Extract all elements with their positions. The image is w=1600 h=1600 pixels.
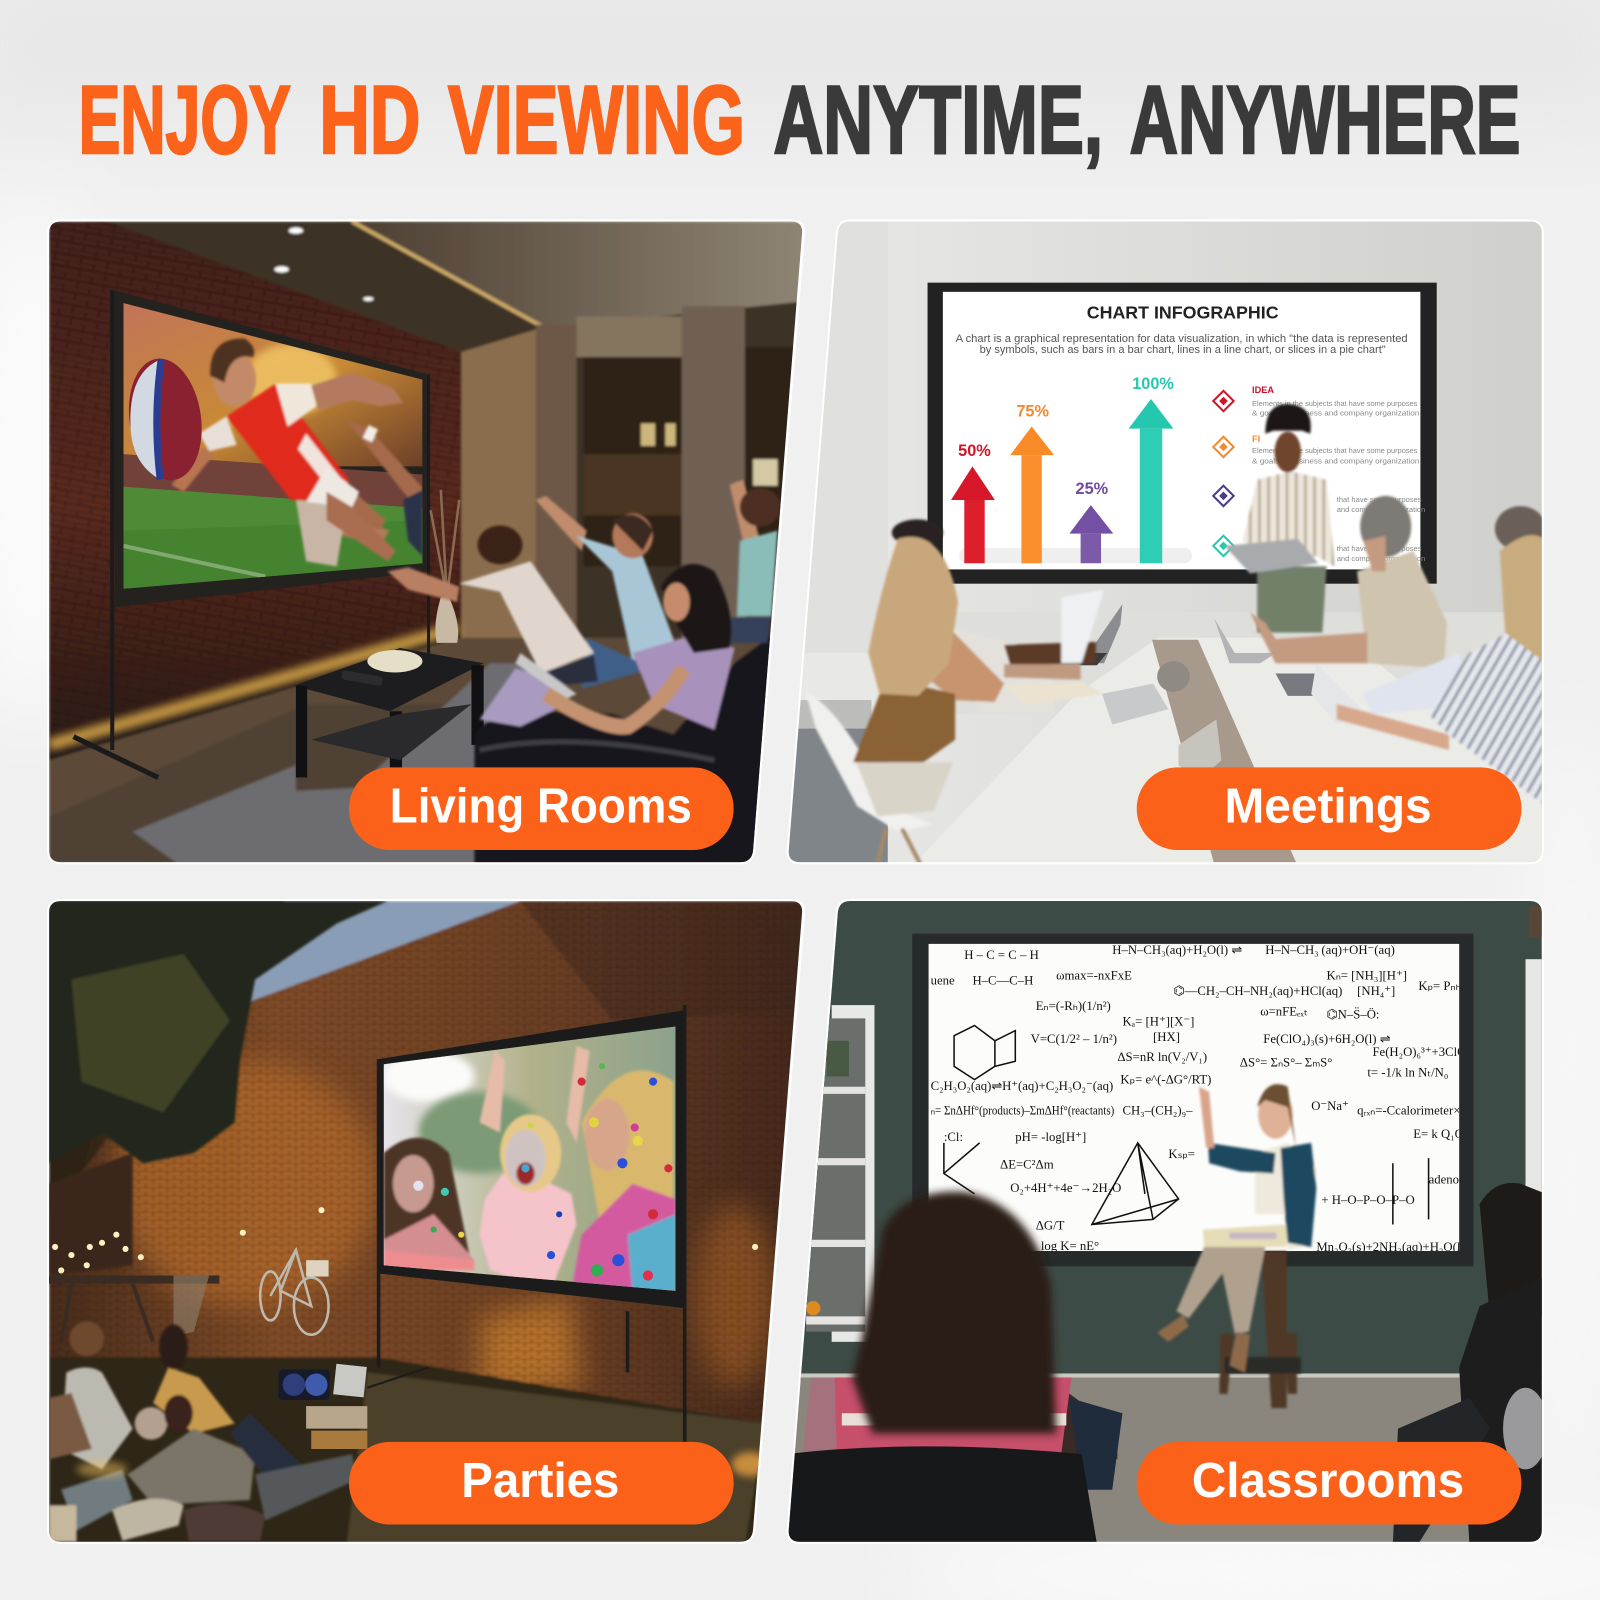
handwritten formulas: uene [931,974,955,988]
coffee table [294,648,484,780]
seated guests [49,1321,357,1542]
title: orange part: ENJOY [79,65,291,174]
arrow 100%: 100% [1132,375,1174,393]
woman with blonde hair [853,537,1004,816]
room background [49,221,809,864]
arrow 25% [1069,480,1113,563]
handwritten formulas: Eₙ=(-Rₕ)(1/n²) [1036,999,1111,1013]
hand-drawn molecule and pyramid [944,1026,1429,1224]
speaker and laptop [279,1364,367,1449]
label pill: Living Rooms: Living Rooms [390,779,692,833]
laptops [1062,604,1315,696]
table and chairs [49,1276,219,1342]
panel: classrooms [786,899,1548,1545]
rugby ball [128,358,202,480]
handwritten formulas: Kₙ= [NH₃][H⁺] [1327,969,1407,983]
handwritten formulas: log K= nE° [1041,1239,1099,1253]
girl on left [384,1138,474,1270]
bookshelves [806,906,1544,1342]
chart legend: that have some purposes [1337,544,1422,553]
chart description: A chart is a graphical representation for data visualization, in which "the data is represented [956,333,1408,345]
handwritten formulas: H – C = C – H [964,948,1039,962]
handwritten formulas: E= k Q₁Q₂/d [1413,1127,1479,1141]
title: orange part: HD [319,65,420,174]
title: orange part [79,65,745,174]
ground lights [77,1452,768,1478]
backyard scene [49,901,809,1544]
presenter [1224,404,1335,633]
chart description [956,333,1408,356]
chart legend: Elements in the subjects that have some purposes [1252,446,1418,455]
string lights [52,1207,758,1273]
chart legend: & goals in business and company organization [1252,456,1419,465]
handwritten formulas: ΔS=nR ln(V₂/V₁) [1117,1050,1207,1064]
handwritten formulas: Kₚ= Pₙₕ [1418,979,1461,993]
panel: meetings [786,219,1546,864]
people on sofa [388,480,781,864]
handwritten formulas: ⌬N–S̈–Ö: [1327,1007,1379,1021]
presentation screen [928,283,1437,584]
handwritten formulas: pH= -log[H⁺] [1015,1130,1086,1144]
chart legend: that have some purposes [1337,495,1422,504]
seated legs [1177,1247,1265,1334]
handwritten formulas: + H–O–P–O–P–O [1321,1193,1415,1207]
handwritten formulas: Kₐ= [H⁺][X⁻] [1122,1015,1194,1029]
label pill: Parties [349,1442,734,1524]
woman in lavender [480,564,735,730]
sofa [474,633,776,864]
outdoor projection screen [378,1010,685,1308]
chemistry screen [912,934,1479,1266]
chart legend: FI [1252,434,1260,444]
conference table [913,638,1546,864]
chart legend: and company organization [1337,554,1425,563]
handwritten formulas: Fe(H₂O)₆³⁺+3ClO₄⁻ [1372,1045,1478,1059]
arrow 25%: 25% [1076,480,1109,498]
handwritten formulas: qᵣₓₙ=-Ccalorimeter×ΔT [1357,1103,1477,1117]
chart legend: and company organization [1337,505,1425,514]
label pill: Meetings: Meetings [1224,779,1432,833]
vase and decor [431,490,459,643]
handwritten formulas: O₂+4H⁺+4e⁻→2H₂O [1010,1181,1121,1195]
arrow 75%: 75% [1016,402,1049,420]
bicycle [260,1250,329,1335]
student with long dark hair [786,1192,1122,1544]
panel: living rooms [47,219,809,864]
handwritten formulas: H–C—C–H [972,974,1033,988]
handwritten formulas: Fe(ClO₄)₃(s)+6H₂O(l) ⇌ [1263,1032,1391,1046]
title: orange part: VIEWING [448,65,745,174]
label pill: Parties: Parties [461,1454,619,1508]
girl on right [571,1070,676,1296]
handwritten formulas: V=C(1/2² – 1/n²) [1031,1032,1117,1046]
attendees at right [1337,506,1546,806]
chart legend: & goals in business and company organization [1252,408,1419,417]
tree [49,901,388,1276]
attendee: grey-haired man [1250,496,1447,668]
handwritten formulas: Kₛₚ= [1168,1147,1195,1161]
handwritten formulas: ΔS°= ΣₙS°– ΣₘS° [1240,1055,1332,1069]
handwritten formulas: ⌬—CH₂–CH–NH₂(aq)+HCl(aq) [1173,984,1342,998]
handwritten formulas [931,943,1479,1254]
handwritten formulas: t= -1/k ln Nₜ/N₀ [1367,1066,1448,1080]
chart description: by symbols, such as bars in a bar chart, lines in a line chart, or slices in a pie chart" [980,344,1386,356]
handwritten formulas: H–N–CH₃ [1265,943,1319,957]
label pill: Living Rooms [349,767,734,850]
person behind with notes [892,519,1104,713]
handwritten formulas: C₂H₃O₂(aq)⇌H⁺(aq)+C₂H₃O₂⁻(aq) [931,1079,1113,1093]
handwritten formulas: O⁻Na⁺ [1311,1099,1349,1113]
classroom wall and floor [786,901,1546,1545]
projection screen: rugby [112,290,429,607]
chart legend: IDEA [1252,385,1274,395]
confetti [413,1063,672,1307]
boy in white shirt [388,526,598,686]
girl in centre [480,1046,590,1291]
handwritten formulas: Mn₂O₃(s)+2NH₃(aq)+H₂O(l) [1316,1240,1465,1254]
screen stand [367,1005,685,1454]
title: dark part: ANYTIME, [773,65,1103,174]
handwritten formulas: adeno [1429,1173,1459,1187]
handwritten formulas: (aq)+OH⁻(aq) [1321,943,1395,957]
handwritten formulas: ₙ= ΣnΔHf°(products)–ΣmΔHf°(reactants) [931,1103,1114,1117]
label pill: Meetings [1137,767,1521,850]
player [171,339,422,566]
handwritten formulas: ωmax=-nxFxE [1056,969,1132,983]
handwritten formulas: [HX] [1153,1030,1180,1044]
handwritten formulas: CH₃–(CH₂)₉– [1122,1103,1193,1117]
handwritten formulas: H–N–CH₃(aq)+H₂O(l) ⇌ [1112,943,1242,957]
chart legend: Elements in the subjects that have some purposes [1252,399,1418,408]
teacher and stool [1157,1084,1316,1408]
chart heading: CHART INFOGRAPHIC [1087,302,1279,322]
kid at right [730,480,781,643]
handwritten formulas: ΔE=C²Δm [1000,1157,1054,1171]
arrow chart [951,375,1192,563]
attendees at left [805,519,1104,864]
white chair [805,691,933,832]
screen stand [73,290,429,778]
stool [1219,1251,1297,1408]
student at right [1393,1183,1548,1544]
office wall [786,221,1546,864]
title [79,65,1520,174]
audience members [786,1183,1548,1544]
man in blue shirt [536,496,679,689]
handwritten formulas: Kₚ= e^(-ΔG°/RT) [1120,1073,1211,1087]
arrow 100% [1129,375,1174,563]
label pill: Classrooms: Classrooms [1192,1454,1464,1508]
arrow 50%: 50% [958,442,991,460]
handwritten formulas: [NH₄⁺] [1357,984,1395,998]
chart legend [1213,385,1425,563]
title: dark part [773,65,1520,174]
handwritten formulas: :Cl: [944,1130,963,1144]
handwritten formulas: ω=nFEₑₓₜ [1260,1004,1308,1018]
arrow 50% [951,442,995,563]
label pill: Classrooms [1137,1442,1521,1524]
panel: parties [47,899,809,1544]
handwritten formulas: ΔG/T [1036,1219,1065,1233]
arrow 75% [1010,402,1054,563]
